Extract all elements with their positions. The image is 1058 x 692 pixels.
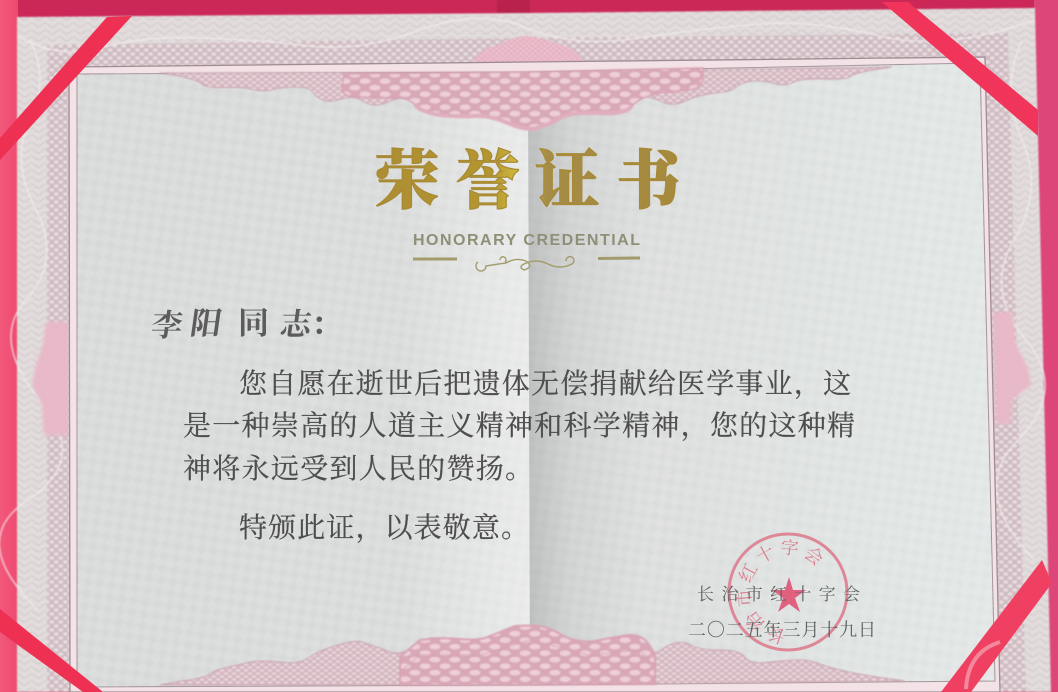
ribbon: top left [0,16,132,160]
central paper [77,63,995,687]
pink top centre ornament [473,36,583,63]
recipient name: ： [311,307,342,342]
body text: 特颁此证，以表敬意。 [239,512,529,544]
watermark on ribbon [966,642,1000,689]
subtitle: HONORARY CREDENTIAL [413,232,640,249]
body text: 神将永远受到人民的赞扬。 [183,453,533,485]
ribbon: bottom right [941,560,1052,692]
body text [183,368,855,544]
body text: 是一种崇高的人道主义精神和科学精神，您的这种精 [183,410,855,442]
body text: 您自愿在逝世后把遗体无偿捐献给医学事业，这 [239,368,851,400]
pink side ornament: left [32,322,68,436]
pink side ornament: right [993,312,1031,424]
issuer: 长治市红十字会 [697,585,860,604]
title: 荣誉证书 [375,146,683,217]
recipient name: 同 [238,306,269,341]
ribbon: top right [882,2,1038,136]
title flourish [413,257,640,271]
recipient name [149,306,342,343]
recipient name: 阳 [188,306,224,341]
bottom ornament [160,626,905,685]
red seal: 长治市红十字会 [736,538,822,644]
top ornament [160,67,892,129]
recipient name: 李 [149,308,185,343]
ribbon: bottom left [0,609,103,692]
recipient name: 志 [278,307,317,342]
date: 二〇二五年三月十九日 [688,619,876,640]
